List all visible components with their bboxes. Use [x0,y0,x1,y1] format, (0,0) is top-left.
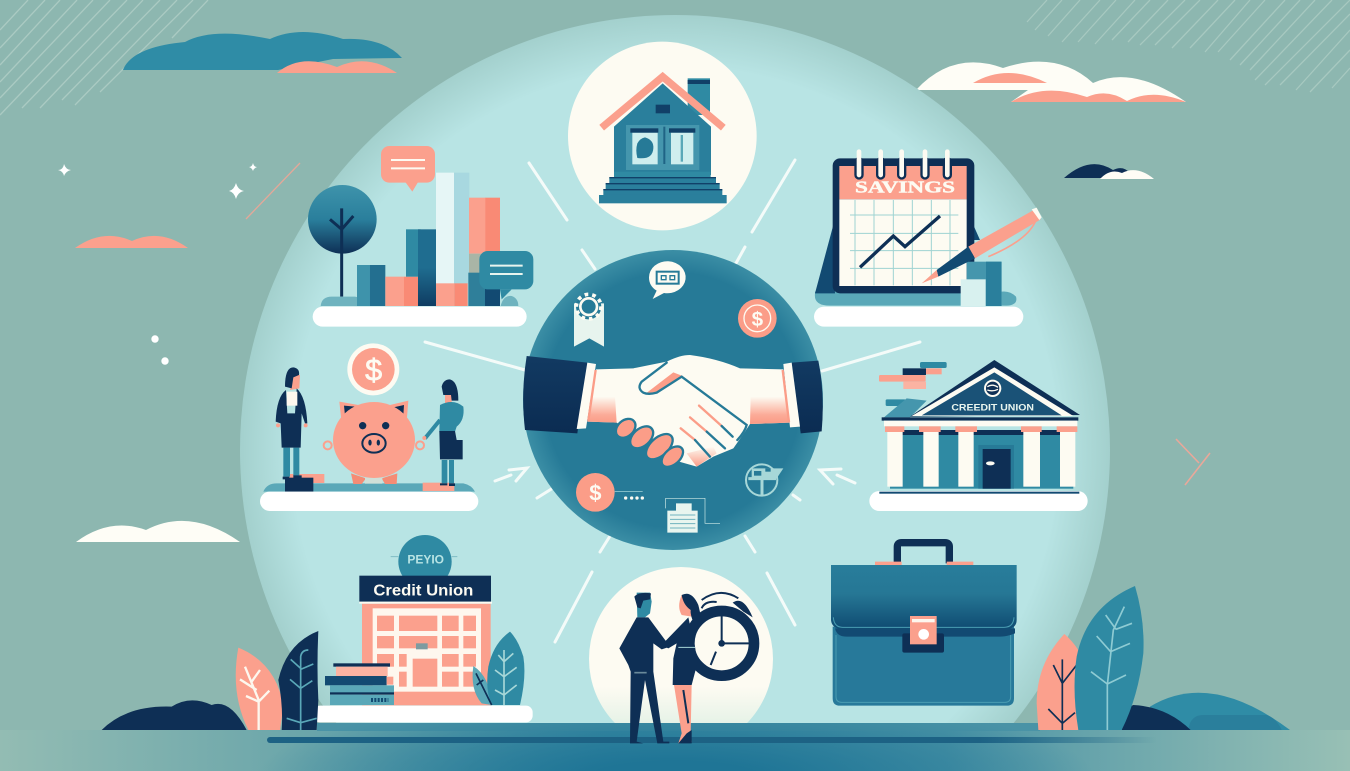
coin: $ [365,354,382,388]
trend line [860,216,940,267]
flap shadow [835,628,1015,637]
cuff stripes [588,370,789,422]
platform [263,483,475,492]
flags [879,362,947,406]
bush teal [1150,693,1290,730]
icon: seal with flag [746,464,783,496]
large pale circle [240,15,1110,771]
spokes and arrows [425,160,920,642]
columns [887,432,1075,487]
cuffs [577,363,800,429]
pink leaf [1037,634,1078,730]
roof [602,77,723,128]
finger lines [681,406,733,457]
wall [890,430,1073,489]
panel: couple and clock [619,593,754,743]
store sign [359,576,492,604]
right sleeve [792,361,823,433]
sign circle [391,535,457,588]
diagonal pink line left [246,163,300,219]
blocks [285,474,454,492]
stand and base [815,225,1016,306]
fingertip shading [687,447,717,467]
leaves [473,632,524,705]
door [978,445,1014,489]
panel: piggy bank scene [260,343,478,511]
coin [347,343,399,395]
hinges [875,562,973,567]
white dots [151,335,169,365]
thumb outline [640,363,747,440]
steps [599,172,727,203]
shelf [313,307,527,327]
bars [357,173,500,306]
alarm clock [689,593,754,676]
store sign: Credit Union [373,582,473,599]
stack of books [325,663,394,705]
panel: savings calendar [814,152,1042,327]
pink speech bubble [381,146,435,192]
icon: ribbon badge with gear [574,294,604,347]
panel: house [568,42,757,230]
building [362,604,491,705]
front windows [626,125,699,170]
leaf group left [102,631,318,730]
emblem [984,380,1001,397]
cloud: teal and pink top left [123,32,402,73]
clasped hands [587,355,790,467]
entablature [882,417,1078,426]
side roof [884,398,927,417]
calendar grid [850,200,958,285]
panel: credit union store [313,535,533,722]
shelf [313,706,533,722]
center icons [574,261,783,533]
shelf [814,307,1023,327]
panel: credit union bank [869,360,1088,511]
diagonal stripes top left [0,0,208,115]
attic window [656,105,670,113]
teal speech bubble [479,251,533,299]
savings heading: SAVINGS [855,178,955,197]
left sleeve [523,356,587,433]
shelf [869,491,1088,511]
icon: dollar coin lower [576,473,644,512]
man [619,593,670,743]
clouds: navy and white small right [1064,164,1154,179]
base line [879,492,1079,494]
leaf group right [1037,586,1290,730]
icon: dollar coin lower: $ [589,481,601,506]
case body [833,627,1014,706]
handle [897,543,949,563]
teal leaf [1075,586,1144,730]
calendar body [833,158,974,293]
blocks [961,262,1002,306]
bush navy [102,700,247,730]
diagonal stripes top right [1027,0,1350,92]
cloud: white bottom left [76,521,240,542]
house body [614,83,711,175]
door tag [416,643,428,649]
window panes [377,616,476,687]
icon: dollar coin upper: $ [752,308,764,331]
flap stitching [833,617,1014,627]
thumb fill [646,372,683,393]
pen [922,208,1042,283]
clock backdrop circle [589,567,773,751]
piggy bank [324,401,424,484]
woman left [276,367,308,479]
fingers [612,415,687,471]
body stitching [836,635,1011,702]
small mound [501,296,518,306]
flap [831,565,1017,629]
shelf [260,492,478,511]
pink Y twig right [1176,439,1210,485]
handshake [523,355,823,471]
clouds: white and pink top right [916,62,1186,102]
sign circle: PEYIO [407,553,444,567]
icon: dollar coin upper [738,299,777,338]
navy leaf [278,631,318,730]
bush navy [1122,705,1191,730]
woman [662,594,702,743]
pediment [910,360,1080,417]
column capitals [885,426,1077,432]
pink leaf [236,648,283,730]
briefcase [831,543,1017,706]
tree [308,185,377,297]
mound [321,297,365,306]
clasp [902,616,944,653]
panel: bar chart scene [308,146,533,327]
central circle [523,250,823,550]
house backdrop circle [568,42,757,230]
bank label: CREEDIT UNION [951,403,1034,413]
sparkle stars [58,163,257,199]
chimney [688,78,710,115]
icon: speech bubble [649,261,686,299]
woman right [422,379,464,486]
icon: document [666,498,720,533]
ground [0,723,1350,771]
cloud: pink left [75,236,188,248]
calendar header [839,166,967,199]
calendar page [839,199,967,286]
wrist shading [587,397,790,424]
binder rings [859,152,947,175]
window frame [373,608,481,692]
